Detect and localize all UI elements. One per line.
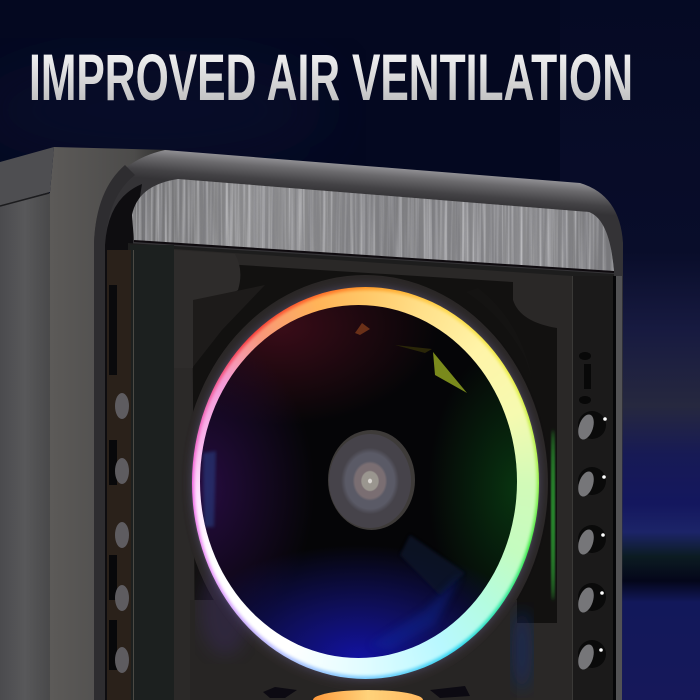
fan housing	[174, 250, 557, 700]
lime fan blade reflection	[202, 323, 467, 646]
fan hub	[328, 430, 415, 530]
case side panel	[0, 147, 170, 700]
second fan ring glimpse at bottom	[313, 690, 423, 700]
right vent strip with louvres	[572, 276, 622, 700]
fan interior	[200, 305, 517, 658]
left vent strip with louvres	[107, 250, 134, 700]
ring light core	[194, 290, 537, 676]
brushed metal top panel	[125, 175, 620, 275]
glass front panel	[128, 243, 614, 700]
RGB fan ring	[192, 287, 539, 679]
case front frame	[94, 150, 623, 700]
